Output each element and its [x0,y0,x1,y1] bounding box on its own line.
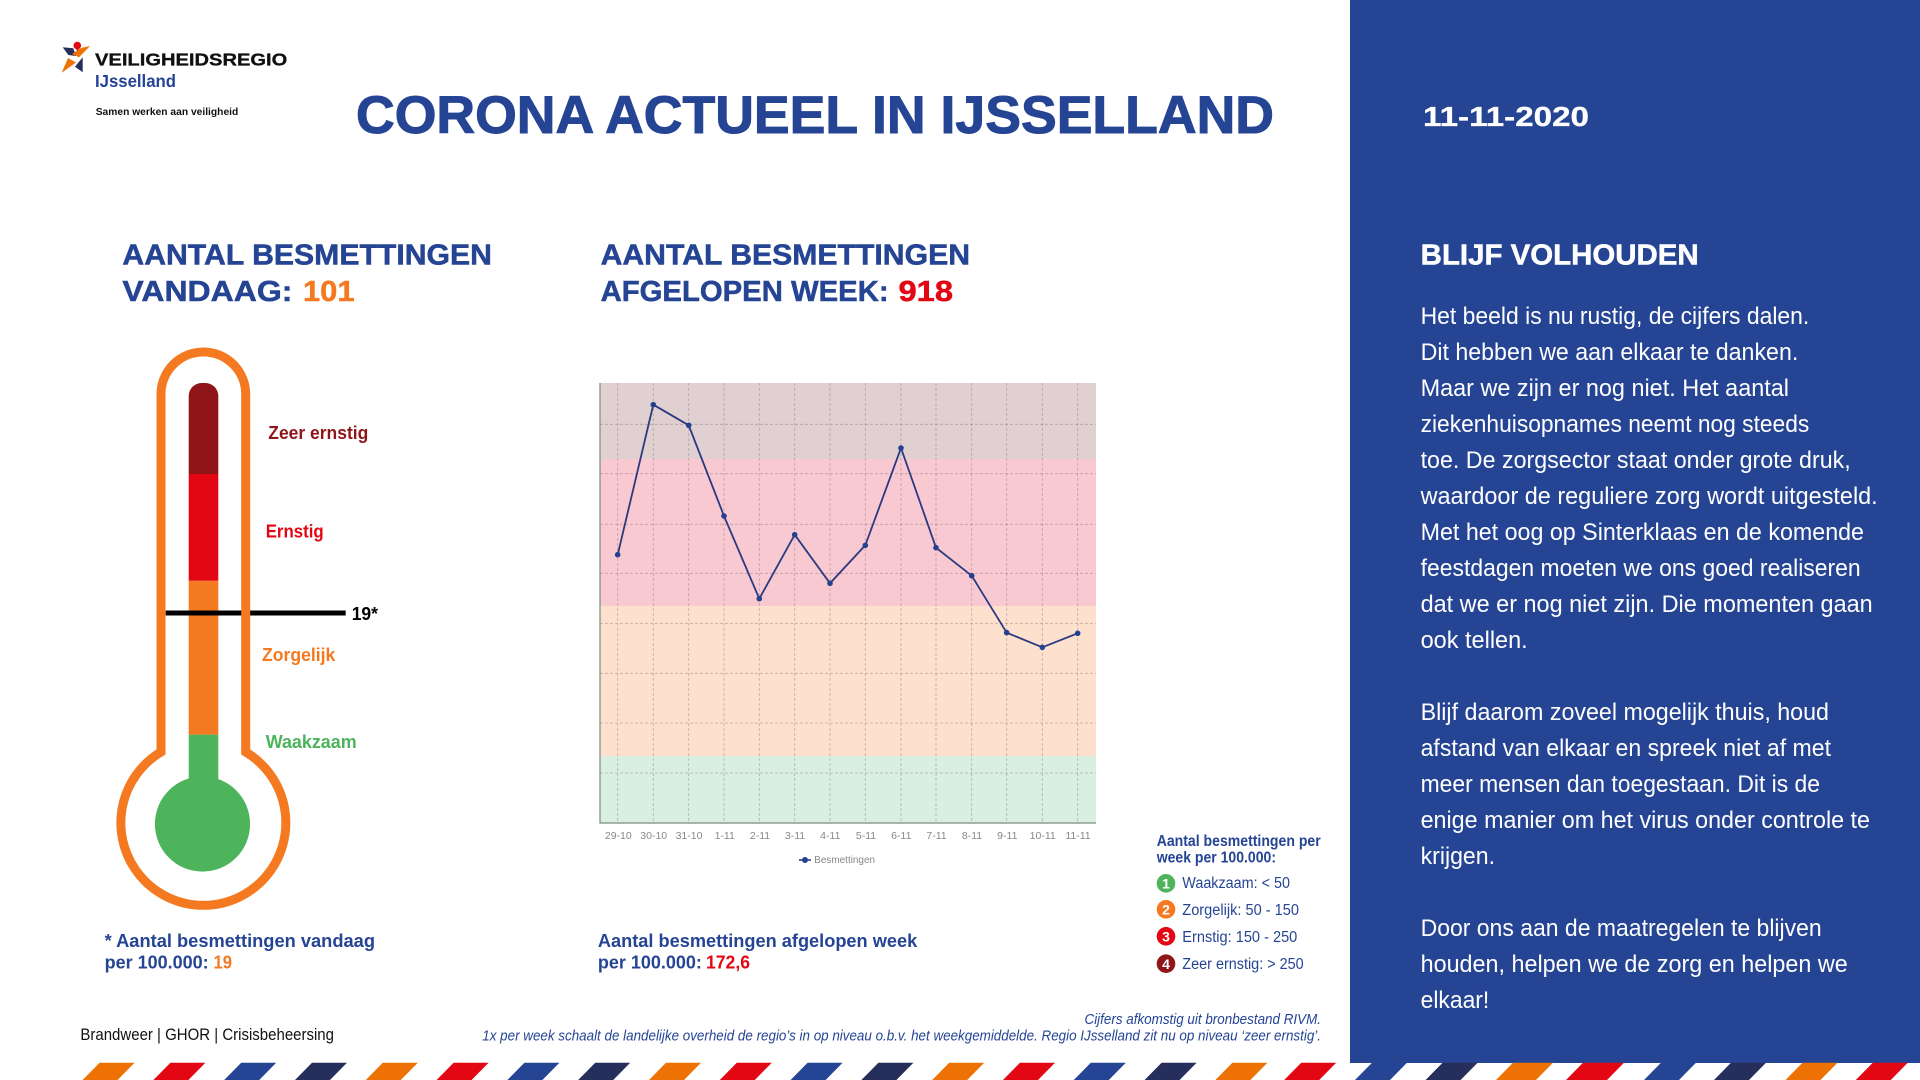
chart band: waakzaam [600,756,1096,823]
legend item 2: Zorgelijk: 50 - 150 [1182,902,1299,919]
sidebar text: paragraph 1: Dit hebben we aan elkaar te danken. [1421,339,1798,366]
icon: logo cross [62,42,90,73]
sidebar text: paragraph 1: feestdagen moeten we ons goed realiseren [1421,555,1861,582]
legend item 4: 4 [1162,956,1170,972]
footer: partners: Brandweer | GHOR | Crisisbeheersing [80,1026,334,1044]
chart x-axis labels: 5-11 [856,830,876,842]
sidebar text: paragraph 2: meer mensen dan toegestaan. Dit is de [1421,771,1820,798]
logo: Veiligheidsregio IJsselland [62,42,287,118]
sidebar text: paragraph 2: krijgen. [1421,843,1495,870]
chart x-axis labels [605,830,1091,842]
legend item 1: Waakzaam: < 50 [1182,875,1290,892]
sidebar text: paragraph 1: Maar we zijn er nog niet. Het aantal [1421,375,1789,402]
heading: infections today: AANTAL BESMETTINGEN [122,240,492,272]
label: waakzaam: Waakzaam [266,732,357,752]
thermometer liquid: zeer ernstig [189,383,218,474]
label: zorgelijk: Zorgelijk [262,645,336,665]
chart x-axis labels: 2-11 [750,830,770,842]
chart x-axis labels: 10-11 [1030,830,1056,842]
chart band: zeer ernstig [600,383,1096,459]
legend heading: Aantal besmettingen per [1157,833,1321,850]
panel: blue sidebar [1350,0,1920,1063]
chart x-axis labels: 29-10 [605,830,632,842]
sidebar text: paragraph 2: enige manier om het virus onder controle te [1421,807,1870,834]
chart x-axis labels: 4-11 [820,830,841,842]
airmail stripe border [83,1063,1908,1080]
legend item 3: 3 [1162,928,1170,944]
logo wordmark: VEILIGHEIDSREGIO [95,50,287,70]
footer: source note: 1x per week schaalt de landelijke overheid de regio’s in op niveau o.b.v. het weekgemiddelde. Regio IJsselland zit nu op niveau ‘zeer ernstig’. [482,1029,1321,1045]
title: CORONA ACTUEEL IN IJSSELLAND [356,86,1274,145]
chart x-axis labels: 6-11 [891,830,912,842]
sidebar text: paragraph 1: Met het oog op Sinterklaas en de komende [1421,519,1864,546]
line chart [600,383,1096,866]
level value: 19* [352,604,378,624]
heading: infections past week [601,240,970,308]
note: per 100.000 past week: 172,6 [706,952,750,972]
legend item 1 [1157,874,1290,893]
sidebar text: paragraph 1: waardoor de reguliere zorg wordt uitgesteld. [1420,483,1878,510]
heading: infections past week: AFGELOPEN WEEK: [601,276,889,308]
thermometer [121,352,378,905]
sidebar text: paragraph 2: afstand van elkaar en spreek niet af met [1421,735,1831,762]
thermometer liquid: waakzaam bulb [155,735,250,872]
chart x-axis labels: 8-11 [962,830,982,842]
logo tagline: Samen werken aan veiligheid [96,106,238,118]
heading: infections today: 101 [303,276,354,308]
logo region name: IJsselland [95,71,176,91]
sidebar text: paragraph 1: ziekenhuisopnames neemt nog steeds [1421,411,1809,438]
note: per 100.000 past week: Aantal besmettingen afgelopen week [598,931,918,951]
sidebar text: paragraph 1 [1420,303,1878,654]
chart x-axis labels: 9-11 [997,830,1018,842]
thermometer liquid: ernstig [189,474,218,581]
note: per 100.000 today: per 100.000: [105,952,209,972]
chart band: ernstig [600,459,1096,606]
sidebar heading: BLIJF VOLHOUDEN [1421,239,1699,271]
chart x-axis labels: 7-11 [926,830,947,842]
legend heading: week per 100.000: [1156,850,1276,867]
legend item 2 [1157,900,1299,919]
sidebar text: paragraph 1: dat we er nog niet zijn. Die momenten gaan [1421,591,1873,618]
sidebar text: paragraph 3: Door ons aan de maatregelen te blijven [1421,915,1822,942]
chart x-axis labels: 11-11 [1065,830,1091,842]
footer: source note: Cijfers afkomstig uit bronbestand RIVM. [1084,1012,1321,1028]
sidebar text: paragraph 1: toe. De zorgsector staat onder grote druk, [1421,447,1851,474]
sidebar text: paragraph 3: elkaar! [1421,987,1489,1014]
label: zeer ernstig: Zeer ernstig [268,423,368,443]
chart x-axis labels: 1-11 [715,830,735,842]
legend item 4: Zeer ernstig: > 250 [1182,956,1304,973]
footer: source note [482,1012,1321,1045]
chart data line [615,402,1080,650]
chart band: zorgelijk [600,606,1096,756]
label: ernstig: Ernstig [266,522,324,542]
legend item 3 [1157,927,1298,946]
heading: infections today: VANDAAG: [122,276,292,308]
chart legend: Besmettingen [814,854,875,866]
sidebar text: paragraph 2: Blijf daarom zoveel mogelijk thuis, houd [1421,699,1829,726]
level marker line [166,610,346,616]
sidebar text: paragraph 2 [1421,699,1870,870]
thermometer outline [121,352,286,905]
chart x-axis labels: 31-10 [676,830,703,842]
sidebar text: paragraph 1: ook tellen. [1421,627,1528,654]
heading: infections today [122,240,492,308]
heading: infections past week: 918 [898,276,953,308]
note: per 100.000 past week: per 100.000: [598,952,702,972]
sidebar text: paragraph 3 [1421,915,1848,1014]
sidebar text: paragraph 1: Het beeld is nu rustig, de cijfers dalen. [1421,303,1809,330]
legend item 3: Ernstig: 150 - 250 [1182,929,1298,946]
legend item 2: 2 [1162,902,1170,918]
legend heading [1156,833,1321,867]
date: 11-11-2020 [1423,101,1589,132]
note: per 100.000 today: * Aantal besmettingen vandaag [105,931,375,951]
note: per 100.000 today: 19 [214,952,232,972]
sidebar text: paragraph 3: houden, helpen we de zorg en helpen we [1421,951,1848,978]
chart x-axis labels: 30-10 [640,830,667,842]
chart x-axis labels: 3-11 [785,830,805,842]
legend item 1: 1 [1162,876,1170,892]
thermometer liquid: zorgelijk [189,581,218,735]
note: per 100.000 today [105,931,375,972]
legend: risk levels [1156,833,1321,973]
note: per 100.000 past week [598,931,918,972]
heading: infections past week: AANTAL BESMETTINGEN [601,240,970,272]
